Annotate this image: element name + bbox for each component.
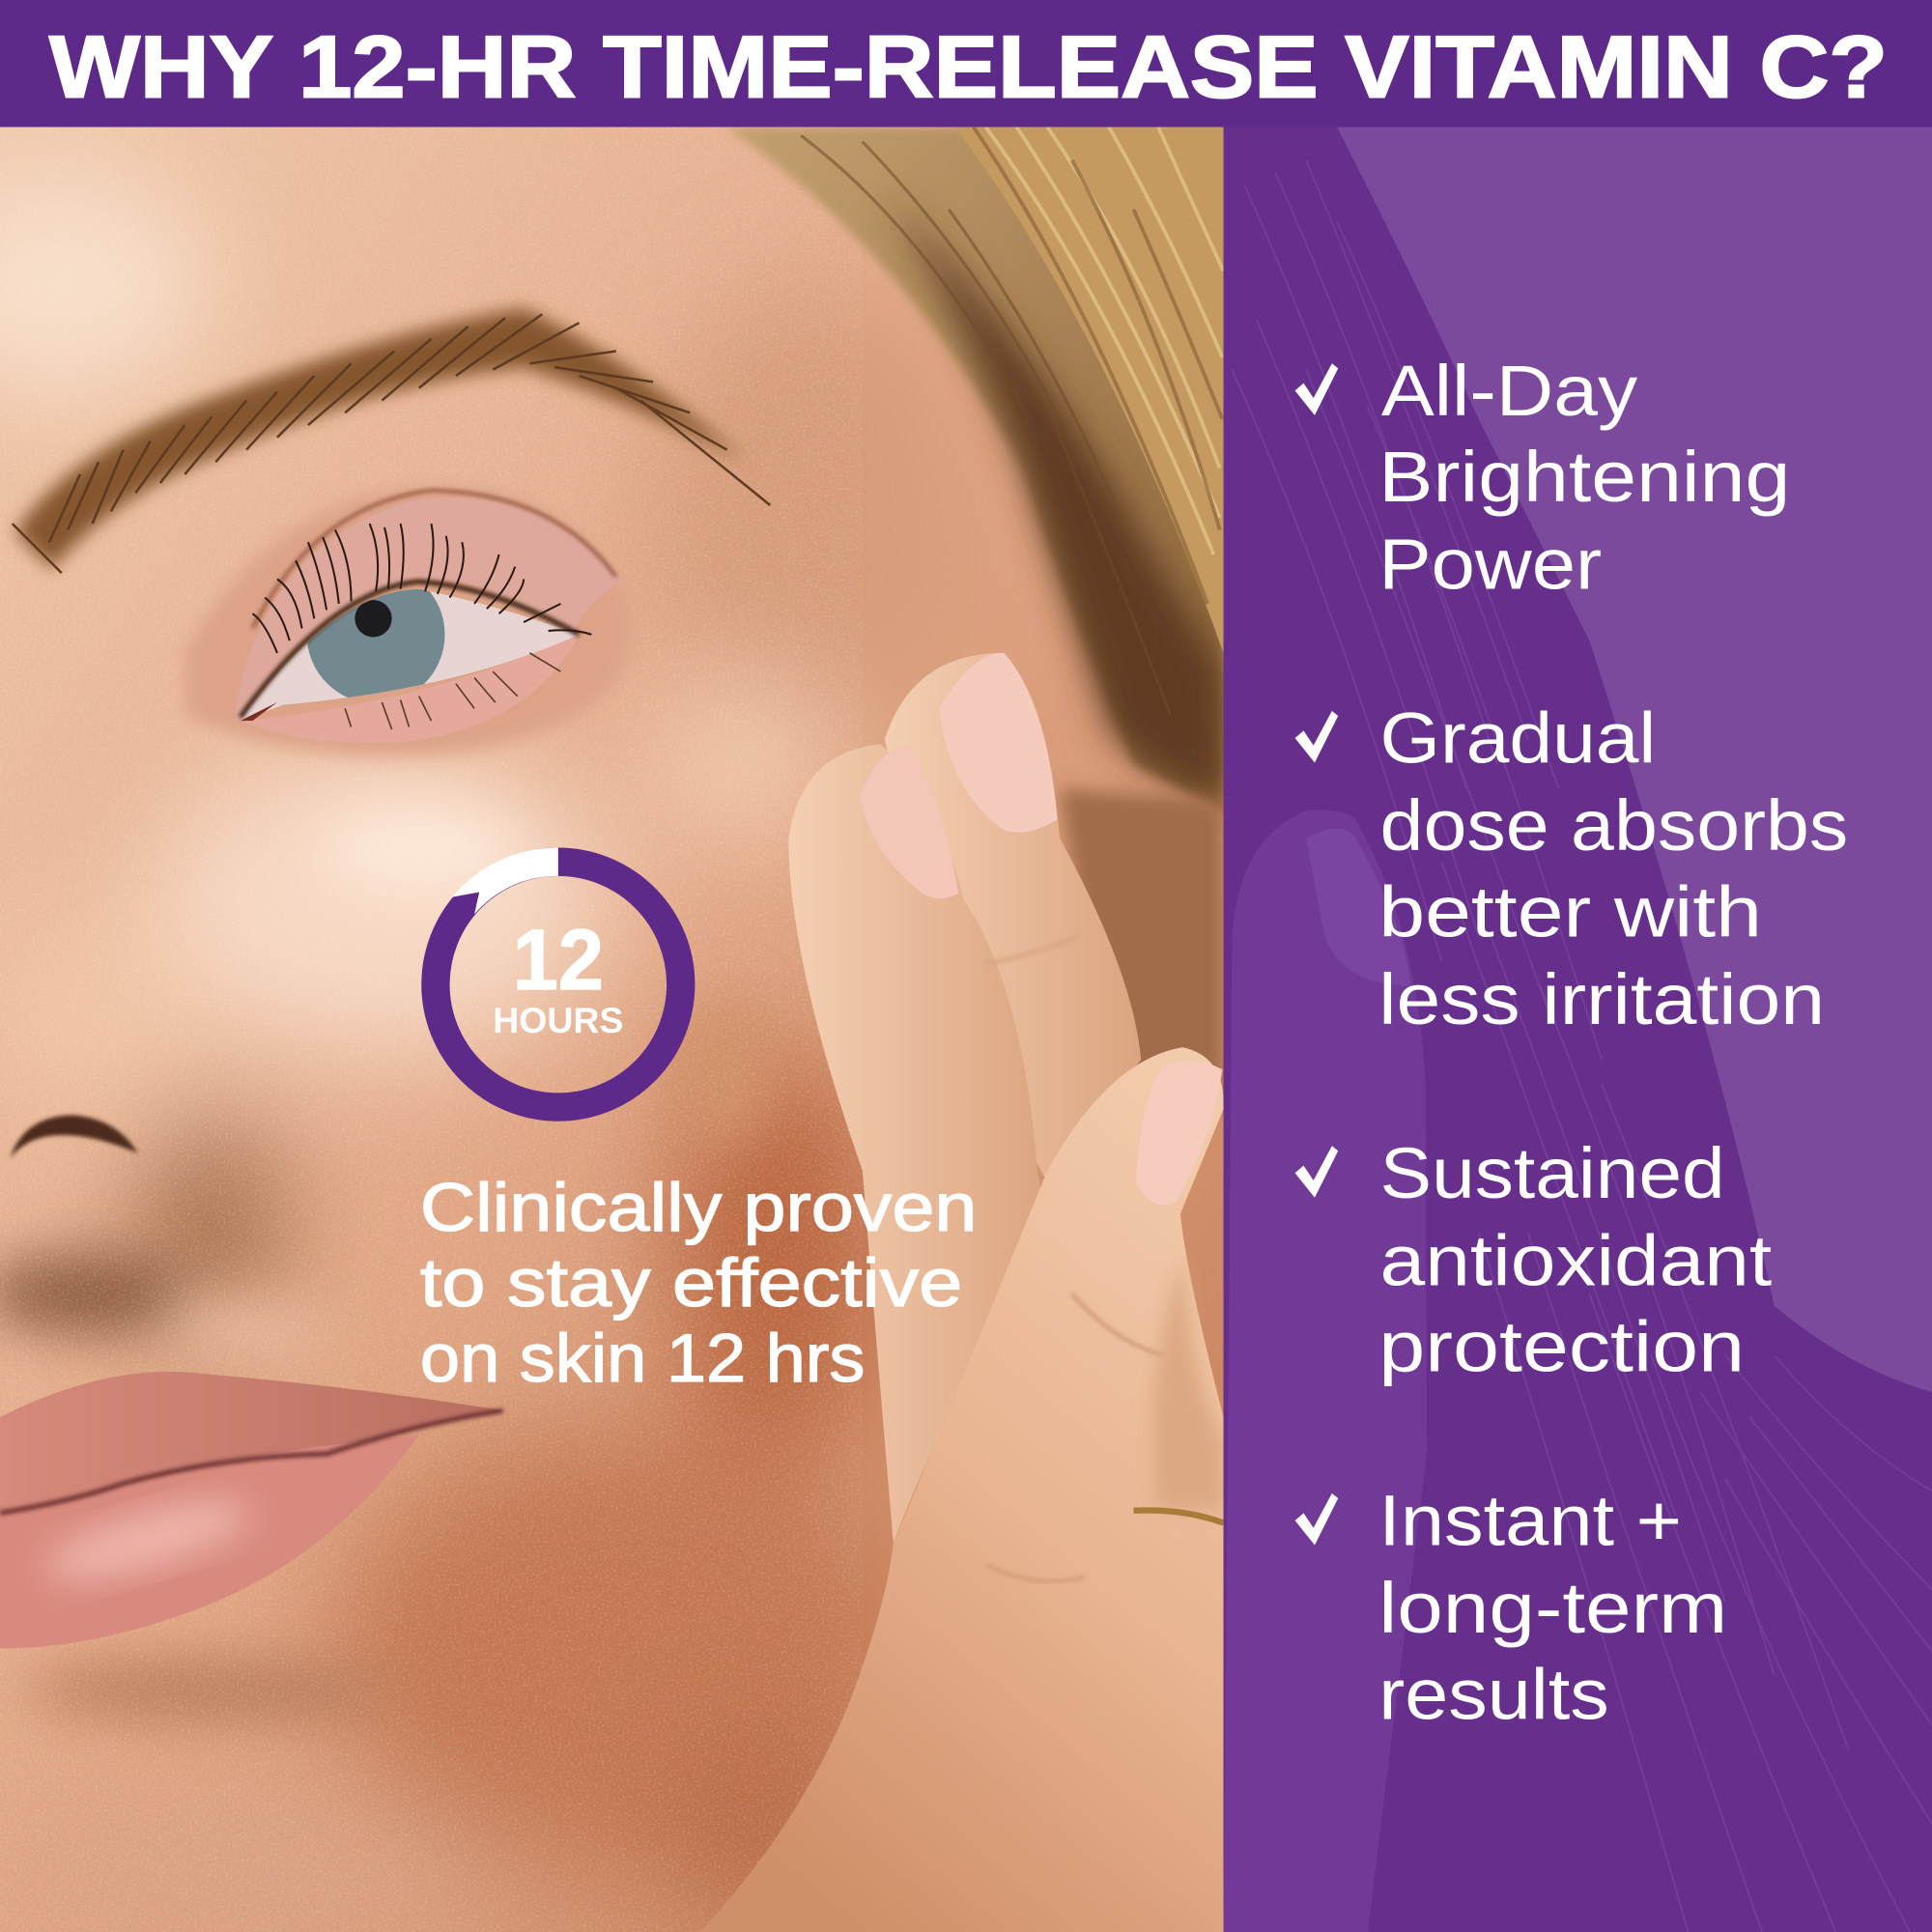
- hand ghost overlay: [1224, 810, 1427, 1932]
- check icon: [1295, 1493, 1338, 1545]
- fingers and hand: [699, 653, 1224, 1932]
- clinical claim text: Clinically proven: [420, 1169, 977, 1245]
- nail: index: [860, 746, 958, 898]
- ring: [1133, 1510, 1224, 1523]
- benefit: gradual dose: less irritation: [1378, 959, 1825, 1039]
- panel: purple benefits background: [1224, 127, 1932, 1932]
- index finger: [788, 744, 1050, 1543]
- hair strand texture: [1233, 160, 1932, 1932]
- benefit: sustained antioxidant protection: protection: [1378, 1307, 1745, 1387]
- shaded skin behind fingers: [1060, 788, 1224, 1109]
- benefit: instant and long-term results: Instant +: [1378, 1480, 1682, 1560]
- benefit: all-day brightening power: [1295, 351, 1790, 605]
- title bar: [0, 0, 1932, 127]
- middle finger: [885, 653, 1141, 1182]
- benefit: gradual dose: dose absorbs: [1380, 785, 1848, 866]
- benefit: all-day brightening power: Power: [1378, 525, 1602, 605]
- title: WHY 12-HR TIME-RELEASE VITAMIN C?: [49, 19, 1888, 117]
- 12 hours ring badge: [436, 848, 681, 1107]
- benefit: all-day brightening power: Brightening: [1378, 437, 1790, 517]
- eyebrow: [13, 308, 770, 573]
- benefit: sustained antioxidant protection: Sustained: [1380, 1133, 1725, 1213]
- ring: purple progress: [436, 862, 681, 1107]
- nostril: [10, 1115, 138, 1158]
- check icon: [1295, 1146, 1338, 1198]
- clinical claim text: on skin 12 hrs: [420, 1320, 865, 1396]
- clinical claim text: to stay effective: [420, 1244, 962, 1321]
- benefit: sustained antioxidant protection: antioxidant: [1380, 1220, 1773, 1300]
- check icon: [1295, 363, 1338, 415]
- number 12: 12: [513, 911, 604, 1008]
- iris: [307, 589, 444, 697]
- benefit: all-day brightening power: All-Day: [1381, 351, 1637, 431]
- benefit: instant and long-term results: long-term: [1378, 1568, 1727, 1648]
- benefit: gradual dose: [1295, 698, 1848, 1039]
- nail: ring: [1136, 1061, 1222, 1205]
- check icon: [1295, 711, 1338, 763]
- lips: [0, 1372, 505, 1649]
- benefit: instant and long-term results: [1295, 1480, 1727, 1734]
- skin base: [0, 127, 1224, 1932]
- hair: [727, 127, 1224, 813]
- benefit: gradual dose: better with: [1378, 871, 1762, 952]
- hair overlay: [1224, 127, 1932, 1932]
- benefit: gradual dose: Gradual: [1380, 698, 1656, 779]
- eye: [185, 487, 632, 756]
- palm and ring finger: [699, 1047, 1224, 1932]
- photo: woman's face with hand on cheek: [0, 127, 1224, 1932]
- benefit: instant and long-term results: results: [1378, 1654, 1609, 1734]
- nail: middle: [939, 653, 1057, 833]
- benefit: sustained antioxidant protection: [1295, 1133, 1773, 1387]
- skin tone shading: [0, 173, 974, 1932]
- skin sheen texture: [0, 127, 863, 1932]
- hours label: HOURS: [493, 1001, 623, 1040]
- ring: white remainder: [452, 848, 558, 914]
- clinical claim text: [420, 1169, 977, 1396]
